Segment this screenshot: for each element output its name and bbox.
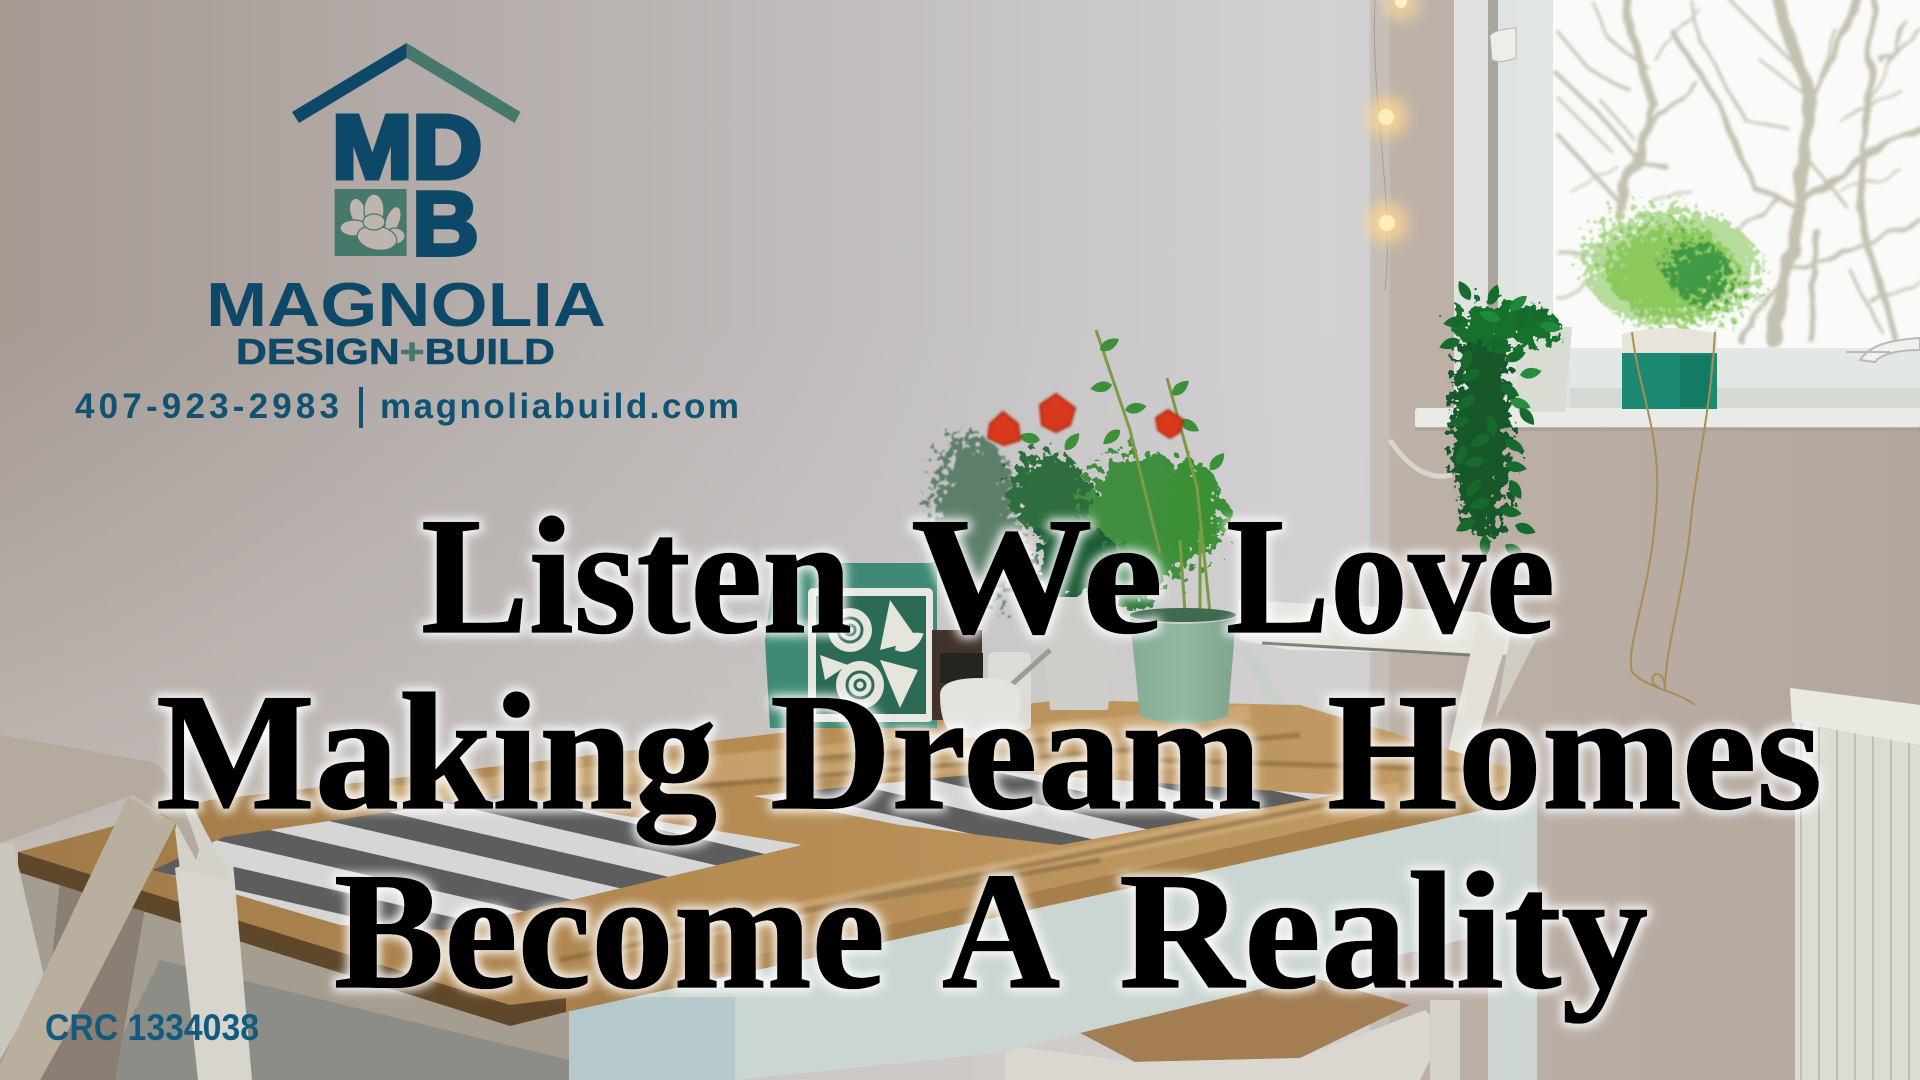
window sensor — [1490, 28, 1516, 62]
plant group: herbs and flowers on the table — [932, 330, 1236, 738]
window glass with trees — [1553, 0, 1920, 348]
contact phone: 407-923-2983 — [75, 387, 339, 426]
company subtitle: DESIGN +BUILD — [236, 331, 555, 372]
logo roof — [292, 43, 520, 123]
chair seat and frame below table — [1005, 950, 1460, 1080]
headline line 3: Reality — [1119, 839, 1648, 1024]
striped pot — [1622, 328, 1717, 409]
plant: fern in striped pot — [1584, 208, 1760, 705]
logo letter B: B — [412, 174, 479, 275]
license number: CRC 1334038 — [45, 1007, 259, 1048]
white pot — [1514, 327, 1572, 412]
window sill — [1415, 408, 1920, 428]
logo: Magnolia Design + Build — [75, 43, 739, 428]
headline line 1: Love — [1226, 484, 1555, 669]
table right leg — [1488, 790, 1537, 1080]
headline line 3 — [334, 839, 1648, 1024]
white pot — [1040, 597, 1119, 710]
headline line 1: Listen — [421, 484, 852, 669]
headline line 3: Become — [334, 839, 885, 1024]
radiator — [1790, 688, 1920, 1080]
table apron — [0, 795, 1506, 1080]
front left chair — [0, 735, 252, 1080]
headline line 2: Making — [156, 660, 717, 845]
green card holder with floral card — [765, 563, 937, 728]
logo letters MD: MD — [332, 98, 482, 198]
table top — [18, 700, 1510, 1026]
string lights — [1367, 0, 1419, 290]
headline line 2: Homes — [1327, 660, 1822, 845]
contact website: magnoliabuild.com — [380, 387, 739, 426]
separator — [359, 387, 363, 428]
headline — [156, 484, 1822, 1024]
red flowers — [988, 394, 1183, 445]
grey-green sprig — [933, 435, 1017, 605]
placemats — [153, 772, 1335, 930]
headline line 1: We — [911, 484, 1163, 669]
plant stems — [1096, 330, 1210, 613]
floral card — [808, 588, 933, 722]
window handle — [1846, 338, 1920, 362]
headline line 1 — [421, 484, 1555, 669]
plant: trailing ivy in white pot — [1390, 278, 1572, 561]
window — [1415, 0, 1920, 431]
headline line 3: A — [942, 839, 1060, 1024]
green foliage — [1010, 452, 1222, 610]
headline line 2 — [156, 660, 1822, 845]
back wall — [0, 0, 1400, 1080]
green pot — [1130, 608, 1236, 724]
chair behind table — [1238, 600, 1536, 765]
jar and cups — [932, 630, 1050, 738]
hanging string — [1631, 332, 1715, 705]
company name: MAGNOLIA — [206, 271, 606, 340]
left placemat — [153, 795, 802, 930]
side wall — [1370, 0, 1920, 1080]
right placemat — [753, 772, 1335, 845]
headline line 2: Dream — [770, 660, 1262, 845]
logo magnolia square — [335, 189, 407, 256]
